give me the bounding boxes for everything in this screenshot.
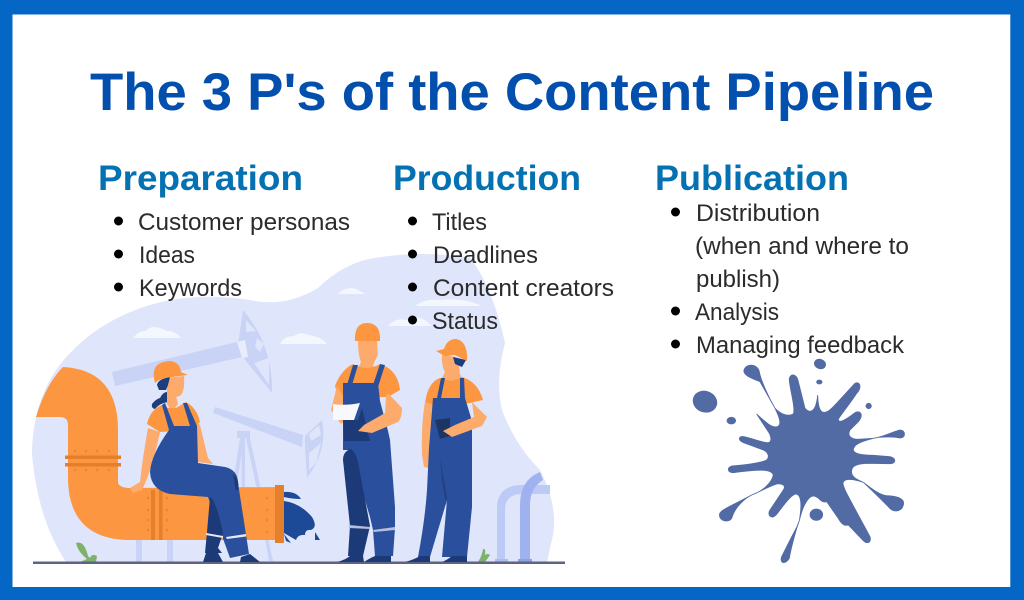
title: The 3 P's of the Content Pipeline bbox=[90, 63, 934, 122]
list: production: Deadlines bbox=[433, 242, 538, 269]
plants bbox=[76, 543, 97, 562]
background oil pump: large bbox=[112, 310, 272, 562]
list: preparation: Customer personas bbox=[138, 209, 350, 236]
list: production: Titles bbox=[432, 209, 487, 236]
column: preparation bbox=[98, 159, 350, 302]
list: publication: Distribution bbox=[696, 200, 820, 227]
list: production: Content creators bbox=[433, 275, 614, 302]
list: publication: (when and where to bbox=[695, 233, 909, 260]
list: publication: Analysis bbox=[695, 299, 779, 326]
list: publication: Managing feedback bbox=[696, 332, 905, 359]
ink splat bbox=[690, 358, 904, 563]
heading: publication: Publication bbox=[655, 159, 849, 198]
heading: preparation: Preparation bbox=[98, 159, 303, 198]
ground line bbox=[33, 562, 565, 564]
list: preparation: Keywords bbox=[139, 275, 242, 302]
water from pipe bbox=[284, 492, 320, 543]
column: production bbox=[393, 159, 614, 335]
list: preparation: Ideas bbox=[139, 242, 195, 269]
worker: man with paper bbox=[331, 323, 402, 562]
heading: production: Production bbox=[393, 159, 581, 198]
list: production: Status bbox=[432, 308, 498, 335]
column: publication bbox=[655, 159, 909, 359]
clouds bbox=[133, 288, 482, 344]
splat body bbox=[719, 365, 904, 563]
illustration: pipeline workers bbox=[32, 254, 565, 564]
background blob bbox=[32, 254, 554, 562]
list: production bbox=[408, 209, 614, 335]
list: publication: publish) bbox=[696, 266, 780, 293]
small pipes bbox=[495, 472, 550, 562]
list: publication bbox=[671, 200, 909, 359]
worker: man with tablet bbox=[405, 339, 487, 562]
splat droplets bbox=[690, 388, 720, 415]
background oil pump: small bbox=[213, 407, 323, 561]
pipe bbox=[36, 367, 284, 543]
list: preparation bbox=[114, 209, 350, 302]
worker: seated woman bbox=[130, 361, 260, 562]
